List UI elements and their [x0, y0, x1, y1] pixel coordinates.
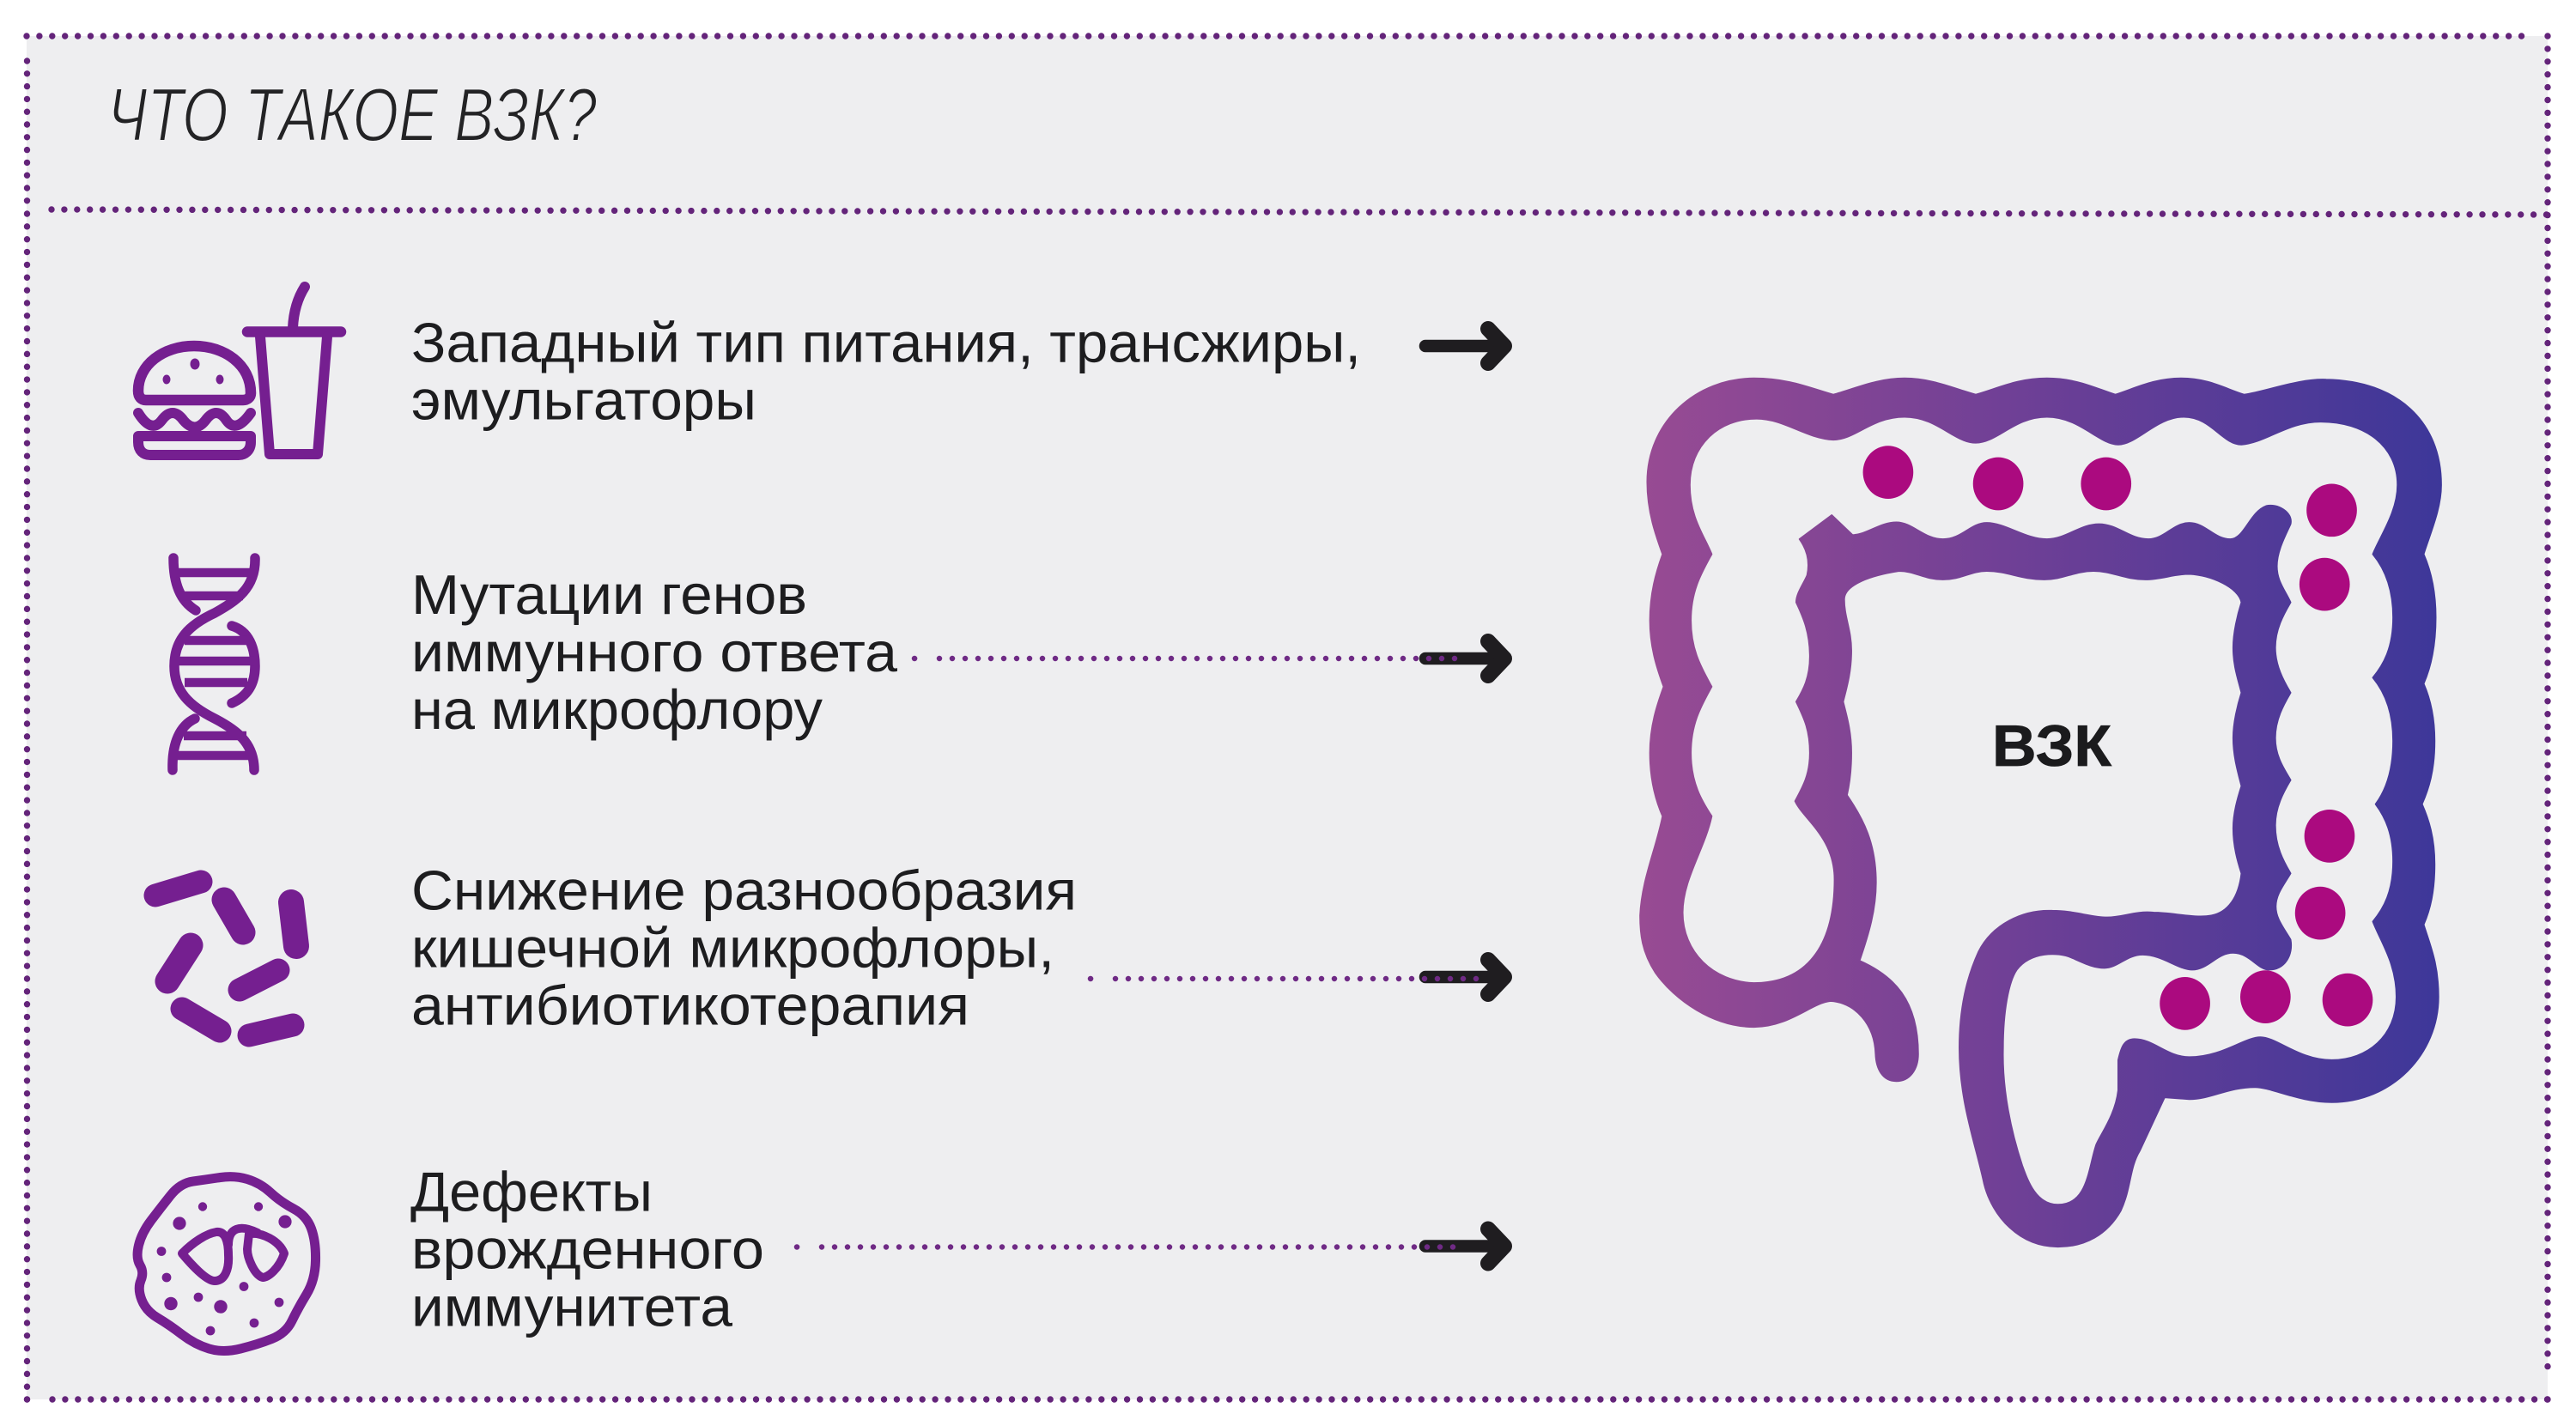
icon: bacteria — [155, 882, 296, 1035]
text: innate immunity defects: Дефекты — [410, 1161, 653, 1223]
text: western diet: Западный тип питания, трансжиры, — [411, 311, 1361, 374]
text: reduced microflora diversity: Снижение разнообразия — [411, 859, 1077, 922]
text: innate immunity defects: иммунитета — [411, 1276, 733, 1338]
icon: DNA helix — [173, 558, 255, 770]
text: western diet — [411, 311, 1361, 431]
text: reduced microflora diversity: кишечной микрофлоры, — [411, 917, 1054, 979]
inflammation dots — [1863, 446, 2372, 1030]
text: innate immunity defects: врожденного — [411, 1217, 764, 1281]
text: western diet: эмульгаторы — [411, 369, 756, 431]
title: ЧТО ТАКОЕ ВЗК? — [107, 72, 597, 157]
icon: immune cell — [137, 1177, 316, 1351]
intestine illustration — [1640, 379, 2441, 1247]
icon: burger and drink — [138, 287, 341, 455]
text: gene mutations: Мутации генов — [411, 563, 807, 626]
text: innate immunity defects — [410, 1161, 764, 1338]
colon outline — [1640, 379, 2441, 1247]
text: reduced microflora diversity — [411, 859, 1077, 1037]
text: reduced microflora diversity: антибиотикотерапия — [411, 974, 969, 1037]
text: gene mutations — [411, 563, 898, 741]
text: gene mutations: иммунного ответа — [411, 621, 898, 683]
text: gene mutations: на микрофлору — [411, 678, 823, 741]
label: IBD: ВЗК — [1992, 713, 2112, 779]
arrow: gene mutations — [914, 641, 1504, 676]
arrow: innate immunity — [797, 1229, 1504, 1264]
arrow: western diet — [1425, 329, 1504, 363]
arrow: reduced microflora — [1091, 960, 1504, 994]
